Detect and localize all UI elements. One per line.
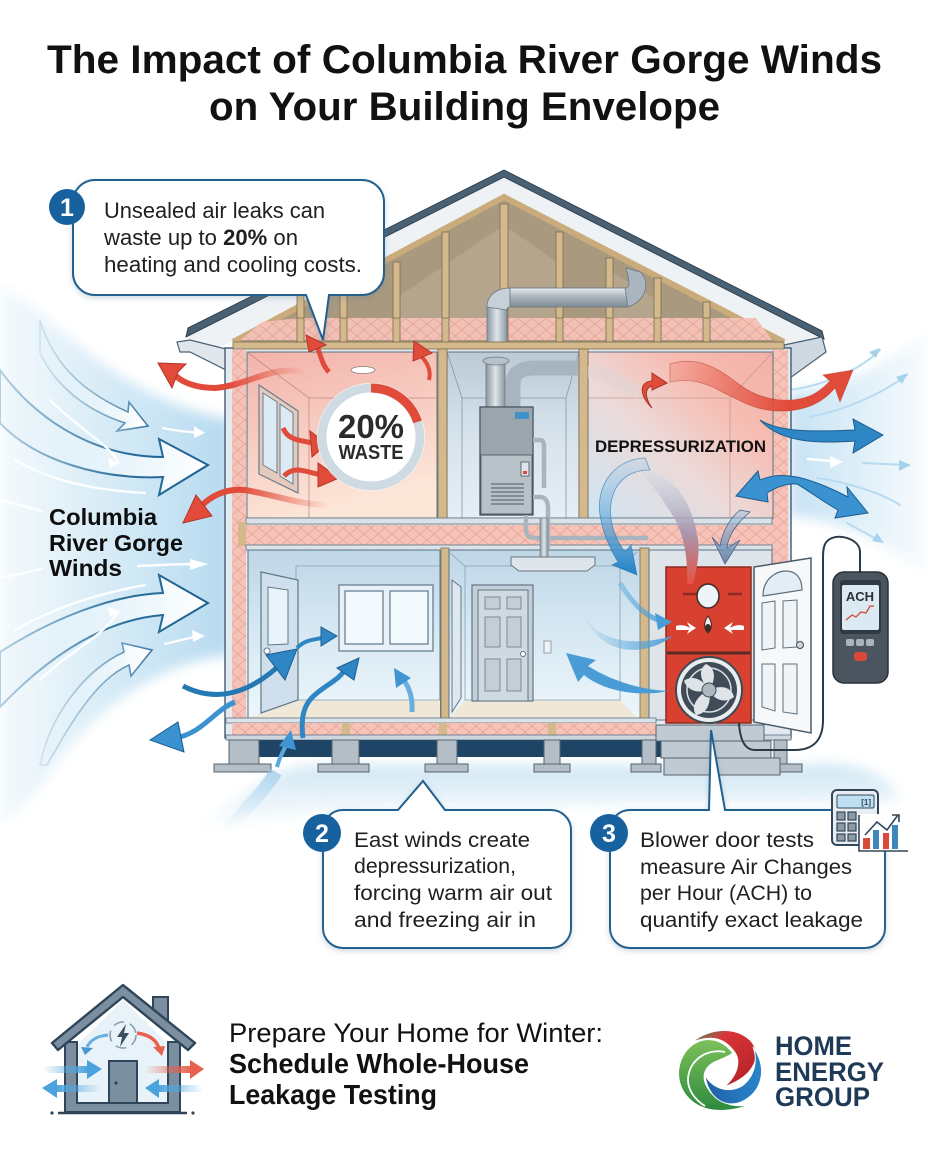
room: upper left [247,352,437,518]
right eave [784,337,826,378]
callout 3 text: Blower door tests [640,828,814,852]
red arm [692,1030,756,1087]
arrow: into right room [566,653,669,693]
arrow: toward donut upper [283,428,327,457]
attic interior [233,197,784,342]
footer call to action: Schedule Whole-House [229,1048,529,1079]
meter buttons [846,639,854,646]
roof [177,170,826,378]
outer walls [225,348,791,738]
attic duct [487,268,646,343]
door [109,1061,137,1103]
winds label: Winds [49,555,122,581]
foundation piers [214,740,802,772]
arrow: up at ceiling left [306,335,329,372]
window [259,385,298,493]
badge 2 [303,814,341,852]
thin white streaks [0,400,200,680]
gauge arc [371,388,418,422]
house [177,170,888,775]
left wall insulation [232,350,246,720]
callout 1 text [103,198,362,277]
icon wash [74,1000,172,1103]
badge 2: 2 [315,820,329,848]
ceiling light [351,366,375,374]
callout 2 text: East winds create [354,828,530,852]
logo wordmark: GROUP [775,1082,870,1112]
blue arm [705,1047,762,1104]
curved blue arrowhead [81,1047,93,1055]
pale streaks [790,350,907,541]
arrow: pale from ground [228,772,276,830]
studs in attic [297,204,710,344]
arrow: fan intake upper [579,605,673,650]
gauge percentage: 20% [338,408,404,445]
stud between lower rooms [441,548,449,720]
callout 2 text: and freezing air in [354,908,536,932]
duct fade into right room [588,372,640,393]
red leak arrows [158,335,853,523]
callout 1 text: Unsealed air leaks can [104,198,325,223]
callout 3 text [640,828,863,932]
left eave and gutter [177,340,230,372]
blue arrow in upper [43,1060,102,1079]
window, lower [339,585,433,651]
red panel [666,567,751,723]
large lower wind arrow [0,575,208,707]
callout 3 text: measure Air Changes [640,855,852,879]
logo wordmark [775,1031,884,1112]
title [47,38,882,129]
arrow: small up [394,668,412,712]
red arrow out [145,1060,204,1079]
base line [50,1111,195,1115]
small top wind arrow [40,320,148,431]
winds label: Columbia [49,504,157,530]
ACH meter: ACH [846,589,874,604]
ceiling register [511,557,595,571]
arrow: out at eave [158,363,305,388]
crawl space [245,740,745,757]
logo wordmark: HOME [775,1031,852,1061]
logo swirl [679,1030,762,1110]
blue arrow out [42,1079,101,1098]
20% waste gauge [317,383,425,491]
white streak heads [108,426,208,642]
supply pipe to register [540,518,548,566]
arrow: right room small [642,373,667,408]
callout 1 text: waste up to 20% on [103,225,298,250]
wind background: right [790,330,928,575]
callout 2 [303,781,571,948]
callout 1 text: heating and cooling costs. [104,252,362,277]
ceiling beam [233,342,784,349]
arrow: double headed right [736,471,868,518]
title: on Your Building Envelope [209,85,720,129]
footer call to action [229,1018,603,1110]
room: furnace closet [447,352,579,518]
white streak head [830,456,843,468]
callout 3 text: per Hour (ACH) to [640,881,812,905]
small white arrows [676,622,744,634]
arrow: out at right eave [670,361,853,411]
flue [486,364,505,408]
floor band between storeys [238,518,772,550]
room: lower left [248,550,440,718]
logo wordmark: ENERGY [775,1057,884,1087]
footer call to action: Leakage Testing [229,1079,437,1110]
gauge label: WASTE [338,442,404,464]
arrow: toward donut lower [284,463,339,487]
streak heads [869,348,911,543]
arrow: out right wall [760,419,883,453]
stud near blower door [640,548,649,720]
arrow: curve down left [599,458,650,575]
logo [679,1030,884,1112]
callout 1 [49,180,384,340]
fan [676,657,742,723]
furnace [480,407,533,515]
callout 3 [590,730,908,948]
rafters [233,197,784,342]
light switch [544,641,551,653]
curved blue arrow [87,1035,108,1047]
door [472,585,533,701]
arrow: red-blue stream right [712,510,750,564]
winds label [49,504,183,581]
steps [656,725,780,775]
blue air arrows, upper right [599,419,883,584]
right wall insulation [772,350,788,720]
gauge dark [705,624,711,632]
curved red arrowhead [153,1046,165,1056]
title: The Impact of Columbia River Gorge Winds [47,38,882,82]
badge 3 [590,814,628,852]
arrow: through floor [277,730,296,767]
left door [261,572,298,713]
meter red button [854,652,867,661]
open front door [754,558,811,733]
arrow: fan intake top [620,583,672,630]
walls [65,1042,180,1112]
curved red arrow [137,1033,159,1048]
interior studs upper [438,349,588,520]
door frame [649,550,772,720]
callout 2 text [354,828,552,932]
winds label: River Gorge [49,530,183,556]
arrow: out low wall [183,490,330,523]
arrow: out low left [150,702,235,752]
fanlight [763,571,802,596]
badge 1 [49,189,85,225]
large upper wind arrow [0,370,208,495]
blue arrow in lower [145,1079,203,1098]
flue cap [483,357,509,365]
ACH meter [833,572,888,683]
wind background: ground [190,764,900,830]
footer call to action: Prepare Your Home for Winter: [229,1018,603,1048]
arrow: big wave into left door [183,649,297,694]
footer: house icon [42,985,204,1115]
panel straps [683,593,742,595]
callout 2 text: depressurization, [354,854,516,878]
door panels [762,600,797,714]
badge 1: 1 [60,194,74,222]
roof [52,985,195,1050]
floor bottom band [226,718,791,740]
meter cable [739,537,860,750]
panel bars [667,652,750,654]
viewing port [697,584,719,608]
arrow: over door [297,627,337,648]
door handle [796,642,804,648]
furnace side pipes [526,440,648,550]
chimney [153,997,168,1034]
roof band, white [188,172,822,352]
gauge [705,616,711,633]
furnace branch duct [513,368,578,407]
arrow: red-blue stream left [640,473,699,584]
wind streaks, right side [790,348,911,543]
blower door assembly [666,567,751,723]
depressurization label: DEPRESSURIZATION [595,437,766,456]
icon: calculator and chart: [1] [861,798,871,807]
attic studs over insulation [297,318,710,342]
badge 3: 3 [602,820,616,848]
arrow: up at ceiling right [413,341,432,380]
green arm [679,1040,745,1110]
callout 3 text: quantify exact leakage [640,908,863,932]
attic shading panels [396,225,657,322]
wind background: left [0,285,232,825]
lightning [110,1022,136,1048]
green separator [688,1051,725,1106]
white streak [808,459,832,461]
wind arrows, left side [0,320,208,765]
roof top edge [186,170,824,339]
attic insulation [240,318,772,340]
room: upper right [588,352,773,518]
side door [452,580,461,712]
icon: calculator and chart [832,790,908,851]
small bottom wind arrow [40,643,152,765]
room: lower right [449,550,649,718]
arrow: wave to window [302,658,359,738]
callout 2 text: forcing warm air out [354,881,552,905]
blue air arrows, lower rooms [150,583,673,830]
perspective lines [247,352,437,518]
